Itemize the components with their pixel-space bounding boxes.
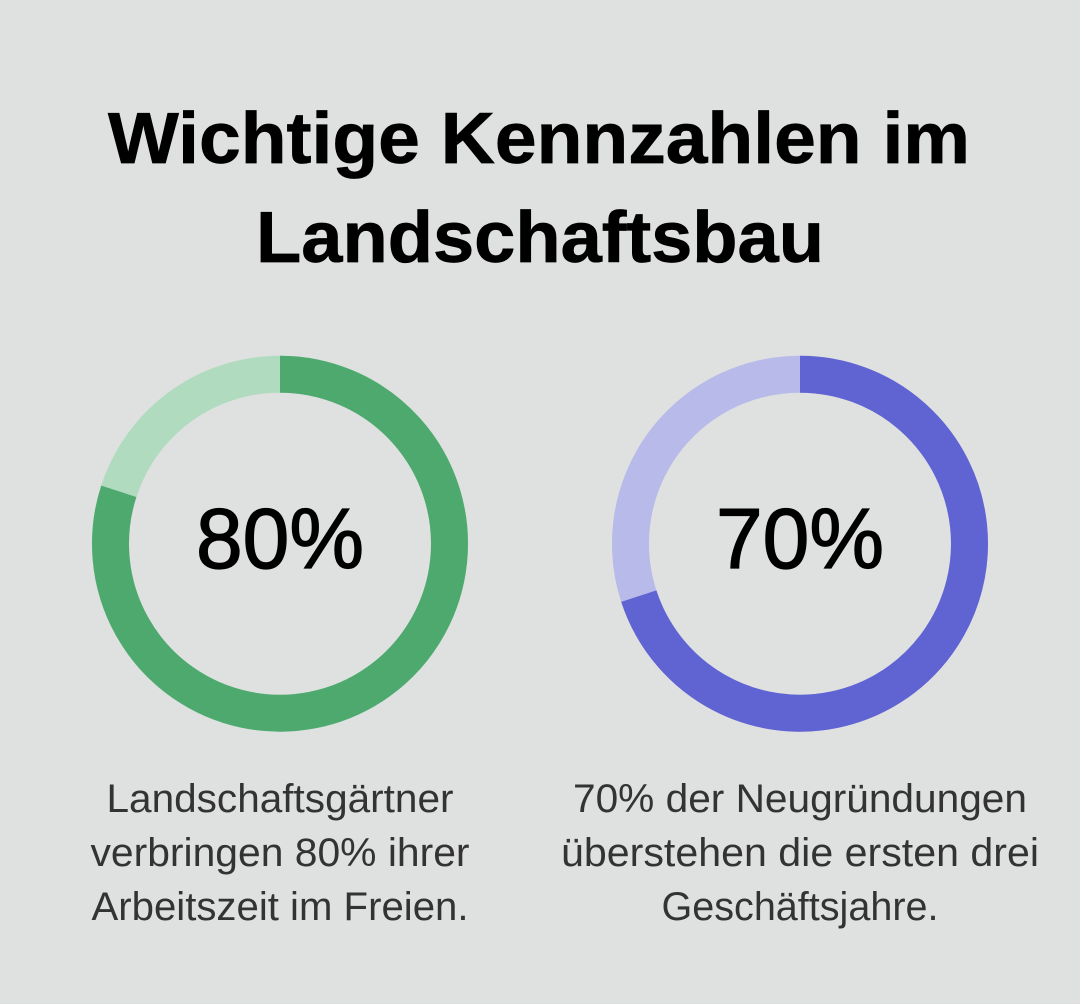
caption: 80%: verbringen 80% ihrer [90, 831, 470, 875]
panel: 80% outdoor work [90, 374, 470, 929]
caption: 80%: Landschaftsgärtner [106, 777, 454, 821]
caption: 80%: Arbeitszeit im Freien. [92, 885, 469, 929]
value: 80%: 80% [196, 492, 364, 587]
donut chart: 80% [110, 374, 449, 713]
title: Landschaftsbau [256, 198, 824, 278]
caption: 70% [561, 777, 1039, 929]
caption: 70%: Geschäftsjahre. [662, 885, 938, 929]
caption: 80% [90, 777, 470, 929]
donut chart: 70% [630, 374, 970, 713]
caption: 70%: 70% der Neugründungen [573, 777, 1027, 821]
panel: 70% new businesses [561, 374, 1039, 929]
title: Wichtige Kennzahlen im [108, 99, 970, 179]
value: 70%: 70% [716, 492, 884, 587]
caption: 70%: überstehen die ersten drei [561, 831, 1039, 875]
title [108, 99, 970, 278]
